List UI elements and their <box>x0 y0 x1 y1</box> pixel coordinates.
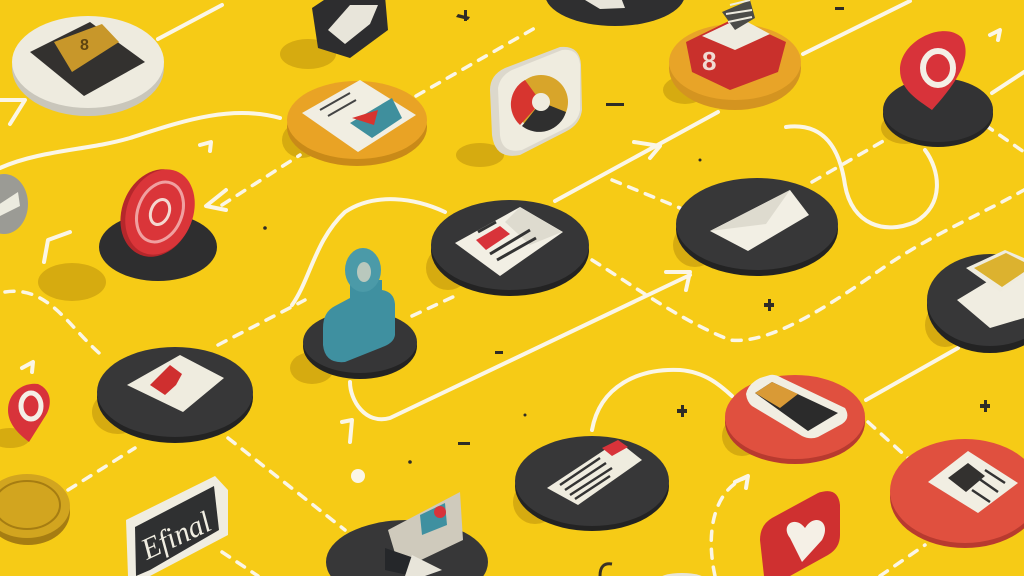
node: dark disc with striped card <box>515 436 669 531</box>
node: dark disc with red target <box>99 158 217 281</box>
node: dark disc with teal person <box>303 248 417 379</box>
node: dark disc with document <box>431 200 589 296</box>
scattered dark specks <box>263 7 990 464</box>
node: dark disc with red-stamped card <box>97 347 253 443</box>
node: dark disc with envelope <box>676 178 838 276</box>
node: white app tile with pie wheel <box>490 47 582 156</box>
node: left red map pin <box>8 384 50 442</box>
node: right dark disc with stacked cards <box>927 250 1024 353</box>
node: red heart badge <box>760 491 840 576</box>
ground shadows <box>0 39 965 524</box>
node: bottom dark disc with camera <box>326 492 488 576</box>
node: red disc with smartphone <box>725 375 865 464</box>
node: gold coin <box>0 474 70 545</box>
node: red disc with newspaper <box>890 439 1024 548</box>
node: sign reading Efinal <box>126 476 228 576</box>
node: dark disc with red map pin <box>883 31 993 147</box>
arrowheads <box>0 30 1000 488</box>
node: bottom small icons <box>600 564 706 576</box>
node: top partial dark disc <box>545 0 685 26</box>
node: sign reading Efinal: Efinal <box>135 505 216 567</box>
node: left edge grey token <box>0 174 28 234</box>
node: top dark block icon <box>312 0 388 58</box>
white dot <box>351 469 365 483</box>
node: orange disc with red pedestal <box>669 0 801 110</box>
node: top-left white disc with gold block: 8 <box>80 37 89 54</box>
node: orange disc with red pedestal: 8 <box>702 46 716 76</box>
node: top-left white disc with gold block <box>12 16 164 116</box>
node: orange disc with document <box>287 80 427 166</box>
